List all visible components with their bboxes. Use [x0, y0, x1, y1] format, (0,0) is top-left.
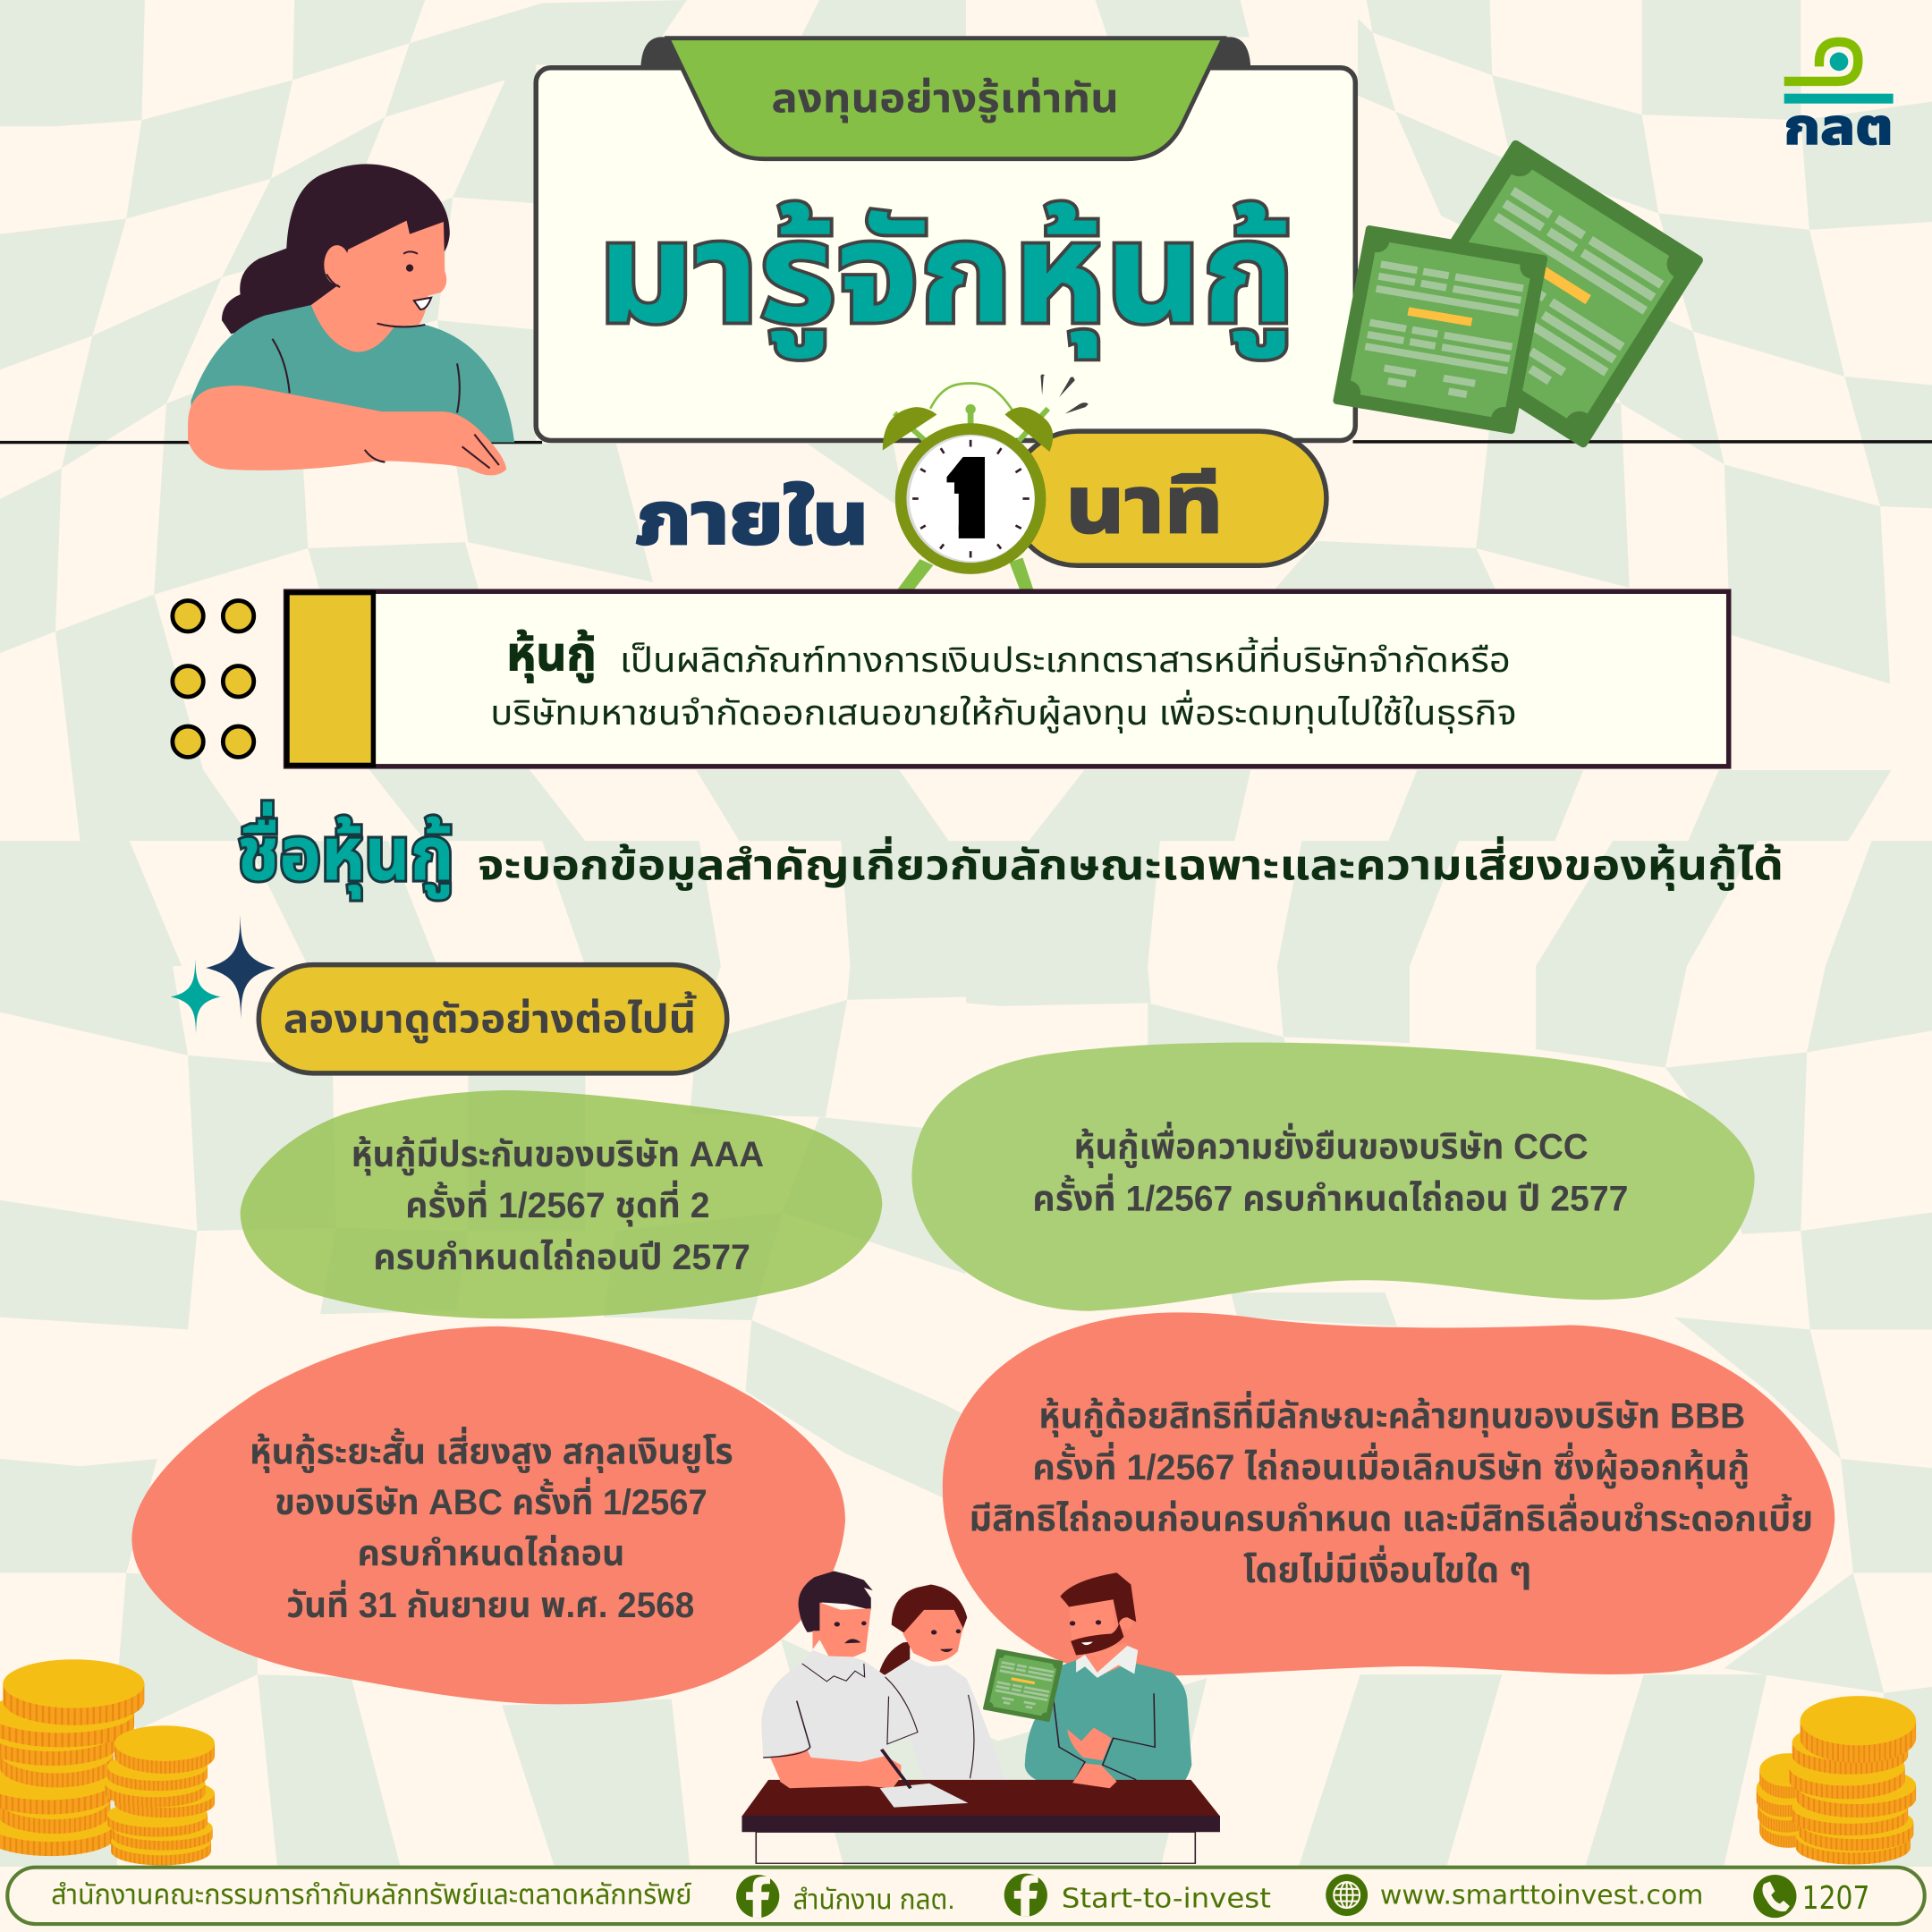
panel: definition: [286, 591, 1729, 767]
pill: examples: [258, 965, 727, 1073]
bubble: short-term debenture: [131, 1326, 845, 1704]
illustration: bond certificates: [1333, 139, 1705, 449]
bubble: short-term debenture: ครบกำหนดไถ่ถอน: [357, 1533, 624, 1573]
bubble: subordinated perpetual debenture: มีสิทธิไถ่ถอนก่อนครบกำหนด และมีสิทธิเลื่อนชำระดอกเบี้ย: [969, 1493, 1813, 1539]
icon: globe: [1326, 1874, 1368, 1916]
footer text: page name: สำนักงาน กลต.: [792, 1883, 955, 1915]
icon: phone: [1753, 1875, 1796, 1918]
horizon line: [0, 439, 1932, 445]
footer text: hotline: 1207: [1802, 1880, 1869, 1917]
bubble: perpetual debenture: หุ้นกู้เพื่อความยั่งยืนของบริษัท CCC: [1074, 1122, 1589, 1169]
illustration: coin stacks right: [1757, 1696, 1916, 1865]
icon: alarm clock showing 1: 1: [931, 405, 1004, 578]
icon: facebook: [736, 1875, 779, 1918]
bubble: secured debenture: ครบกำหนดไถ่ถอนปี 2577: [373, 1237, 750, 1277]
bubble: perpetual debenture: ครั้งที่ 1/2567 ครบกำหนดไถ่ถอน ปี 2577: [1032, 1173, 1628, 1218]
illustration: people at table: [741, 1572, 1220, 1863]
footer bar: [7, 1868, 1925, 1924]
bubble: short-term debenture: ของบริษัท ABC ครั้งที่ 1/2567: [275, 1477, 708, 1522]
icon: facebook second: [1004, 1874, 1047, 1917]
main title: มารู้จักหุ้นกู้: [597, 196, 1295, 360]
icon: alarm clock showing 1: [883, 374, 1089, 594]
heading: bond name: ชื่อหุ้นกู้: [237, 801, 454, 900]
pill: examples: ลองมาดูตัวอย่างต่อไปนี้: [284, 991, 697, 1043]
bubble: secured debenture: หุ้นกู้มีประกันของบริษัท AAA: [352, 1134, 764, 1176]
panel: definition: หุ้นกู้: [506, 627, 597, 682]
bubble: short-term debenture: วันที่ 31 กันยายน พ.ศ. 2568: [286, 1580, 694, 1625]
ribbon heading: ลงทุนอย่างรู้เท่าทัน: [771, 75, 1119, 123]
dots decoration: [173, 601, 254, 758]
logo: SEC Thailand: กลต: [1784, 99, 1894, 155]
illustration: woman leaning on line: [188, 164, 514, 475]
icon: sparkles: [171, 915, 275, 1034]
bubble: subordinated perpetual debenture: หุ้นกู้ด้อยสิทธิที่มีลักษณะคล้ายทุนของบริษัท BBB: [1038, 1390, 1745, 1438]
logo: SEC Thailand: [1784, 42, 1894, 155]
bubble: subordinated perpetual debenture: ครั้งที่ 1/2567 ไถ่ถอนเมื่อเลิกบริษัท ซึ่งผู้ออกหุ้นกู้: [1032, 1442, 1750, 1489]
title card: [536, 37, 1355, 440]
illustration: coin stacks left: [0, 1659, 215, 1866]
bubble: subordinated perpetual debenture: โดยไม่มีเงื่อนไขใด ๆ: [1243, 1545, 1531, 1590]
bubble: secured debenture: [241, 1090, 882, 1318]
bubble: subordinated perpetual debenture: [943, 1312, 1835, 1676]
footer text: organisation: สำนักงานคณะกรรมการกำกับหลักทรัพย์และตลาดหลักทรัพย์: [51, 1877, 692, 1910]
footer text: start to invest: Start-to-invest: [1062, 1883, 1271, 1914]
bubble: short-term debenture: หุ้นกู้ระยะสั้น เสี่ยงสูง สกุลเงินยูโร: [250, 1426, 733, 1474]
footer text: website: www.smarttoinvest.com: [1380, 1879, 1703, 1910]
bubble: perpetual debenture: [911, 1043, 1755, 1311]
text: within: ภายใน: [636, 479, 869, 560]
yellow pill: minutes: [1011, 431, 1326, 565]
panel: definition: เป็นผลิตภัณฑ์ทางการเงินประเภทตราสารหนี้ที่บริษัทจำกัดหรือ: [620, 637, 1511, 680]
yellow pill: minutes: นาที: [1066, 461, 1223, 549]
text: bond name explanation: จะบอกข้อมูลสำคัญเกี่ยวกับลักษณะเฉพาะและความเสี่ยงของหุ้นกู้ได้: [478, 835, 1784, 891]
bubble: secured debenture: ครั้งที่ 1/2567 ชุดที่ 2: [405, 1180, 709, 1227]
panel: definition: บริษัทมหาชนจำกัดออกเสนอขายให้กับผู้ลงทุน เพื่อระดมทุนไปใช้ในธุรกิจ: [490, 690, 1517, 733]
